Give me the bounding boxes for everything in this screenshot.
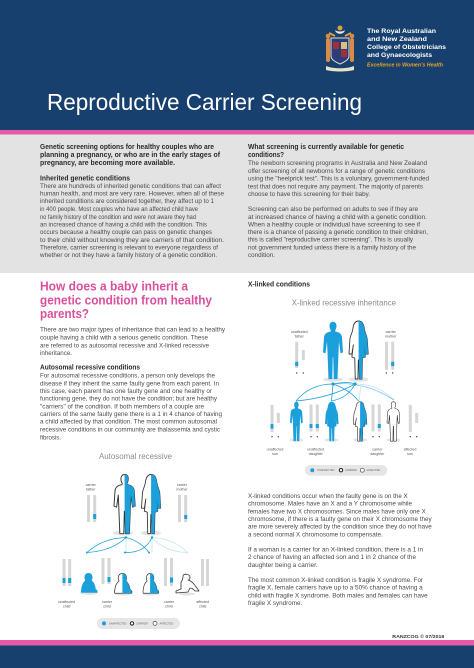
- parent and child labels: carrier: [372, 447, 383, 451]
- figure: carrier child: [114, 574, 132, 593]
- fragile x text: [248, 577, 428, 607]
- header band: [0, 0, 474, 134]
- inherited conditions text: an increased chance of having a child with the condition. This: [40, 221, 208, 228]
- parent and child labels: [58, 483, 209, 608]
- adult screening text: [248, 206, 428, 259]
- parent and child labels: child: [63, 604, 70, 608]
- heading: inherited genetic conditions: Inherited genetic conditions: [40, 175, 130, 182]
- parent and child labels: affected: [404, 447, 416, 451]
- footer band: [0, 640, 474, 668]
- parent and child labels: son: [407, 452, 413, 456]
- parent and child labels: carrier: [86, 483, 97, 487]
- parent and child labels: carrier: [386, 330, 397, 334]
- figure: carrier mother: [142, 474, 161, 534]
- inherited conditions text: human health, and most are very rare. However, when all of these: [40, 190, 224, 197]
- inherited conditions text: [39, 183, 224, 259]
- legend: [305, 465, 387, 476]
- inherited conditions text: inherited conditions are considered together, they affect up to 1: [40, 198, 214, 205]
- autosomal recessive text: "carriers" of the condition. If both members of a couple are: [40, 403, 204, 410]
- carrier chance text: [248, 546, 423, 569]
- college name: The Royal Australian: [367, 29, 436, 35]
- college name: College of Obstetricians: [367, 45, 447, 51]
- inherited conditions text: occurs because a healthy couple can pass on genetic changes: [40, 229, 213, 236]
- fragile x text: fragile X, female carriers have up to a 50% chance of having a: [248, 585, 423, 592]
- parent and child labels: unaffected: [58, 600, 75, 604]
- inheritance arrows: [296, 382, 394, 401]
- figure: unaffected father: [323, 322, 343, 379]
- panel: grey intro: [0, 134, 474, 273]
- x-linked explanation text: chromosome, if there is a faulty gene on their X chromosome they: [248, 516, 432, 523]
- college name: and New Zealand: [367, 37, 427, 43]
- inherited conditions text: whether or not they have a family history of a genetic condition.: [39, 252, 217, 259]
- newborn screening text: The newborn screening programs in Australia and New Zealand: [248, 160, 427, 167]
- parent and child labels: child: [165, 604, 173, 608]
- x-linked explanation text: females have two X chromosomes. Since males have only one X: [248, 508, 426, 515]
- adult screening text: When a healthy couple or individual have screening to see if: [248, 221, 420, 228]
- x-linked explanation text: are more severely affected by the condition since they do not have: [248, 524, 432, 531]
- parent and child labels: child: [199, 604, 206, 608]
- parent and child labels: father: [86, 488, 96, 492]
- fragile x text: child with fragile X syndrome. Both males and females can have: [248, 592, 428, 599]
- figure: carrier daughter: [353, 402, 367, 441]
- college name: Excellence in Women's Health: [367, 63, 443, 69]
- parent and child labels: unaffected: [291, 330, 308, 334]
- chromosome bars: children: [270, 404, 418, 437]
- heading: autosomal recessive conditions: Autosomal recessive conditions: [40, 365, 140, 372]
- figure: carrier mother: [349, 321, 368, 379]
- figure: affected child: [176, 574, 199, 593]
- autosomal recessive text: a child affected by that condition. The most common autosomal: [40, 419, 218, 426]
- legend: UNAFFECTED: [109, 621, 127, 625]
- newborn screening text: offer screening of all newborns for a range of genetic conditions: [248, 168, 426, 175]
- title: Reproductive Carrier Screening: [47, 89, 362, 115]
- inheritance arrows: [86, 536, 188, 554]
- inherited conditions text: Therefore, carrier screening is relevant to everyone regardless of: [40, 244, 218, 251]
- legend: CARRIER: [345, 468, 357, 472]
- inherited conditions text: to their child without knowing they are carriers of that condition.: [40, 237, 224, 244]
- parent and child labels: carrier: [177, 483, 188, 487]
- parent and child labels: daughter: [370, 452, 385, 456]
- parent and child labels: affected: [196, 600, 209, 604]
- shadows: [80, 530, 195, 596]
- intro lead: pregnancy, are becoming more available.: [40, 160, 175, 167]
- parent and child labels: unaffected: [307, 447, 324, 451]
- x-linked explanation text: a second normal X chromosome to compensate.: [248, 531, 383, 538]
- college name: and Gynaecologists: [367, 53, 433, 59]
- parent and child labels: daughter: [309, 452, 324, 456]
- heading: how does a baby inherit: parents?: [40, 306, 89, 321]
- diagram title: X-linked recessive inheritance: [292, 298, 397, 308]
- heading: x-linked conditions: X-linked conditions: [248, 281, 310, 288]
- parent and child labels: carrier: [102, 600, 113, 604]
- heading: what screening is available: conditions?: [248, 152, 284, 159]
- chart: autosomal recessive diagram: [58, 452, 209, 629]
- fragile x text: The most common X-linked condition is fragile X syndrome. For: [248, 577, 424, 584]
- newborn screening text: using the "heelprick test". This is a voluntary, government-funded: [248, 175, 429, 182]
- fragile x text: fragile X syndrome.: [248, 600, 302, 607]
- x-linked explanation text: chromosome. Males have an X and a Y chromosome while: [248, 501, 412, 508]
- carrier chance text: If a woman is a carrier for an X-linked condition, there is a 1 in: [248, 546, 423, 553]
- screening text column: [248, 144, 429, 259]
- parent and child labels: mother: [385, 334, 397, 338]
- parent and child labels: child: [103, 604, 111, 608]
- parent and child labels: [267, 330, 416, 456]
- inheritance intro text: inheritance.: [40, 350, 72, 357]
- newborn screening text: choose to have this screening for their baby.: [248, 191, 370, 198]
- footer credit: RANZCOG © 07/2019: [392, 633, 445, 640]
- legend: [97, 618, 180, 629]
- adult screening text: at increased chance of having a child with a genetic condition.: [248, 214, 427, 221]
- autosomal recessive text: functioning gene, they do not have the condition; but are healthy: [40, 396, 218, 403]
- adult screening text: Screening can also be performed on adults to see if they are: [248, 206, 418, 213]
- autosomal recessive text: For autosomal recessive conditions, a person only develops the: [40, 373, 215, 380]
- heading: what screening is available: What screening is currently available for genetic: [248, 144, 404, 151]
- legend: UNAFFECTED: [317, 468, 335, 472]
- icon: college crest: [326, 26, 354, 72]
- adult screening text: condition.: [248, 252, 275, 259]
- chromosome bars: parents: [87, 495, 187, 522]
- inheritance intro text: couple having a child with a serious genetic condition. These: [40, 335, 208, 342]
- heading: how does a baby inherit: [40, 279, 213, 321]
- inheritance intro text: are referred to as autosomal recessive and X-linked recessive: [40, 342, 209, 349]
- parent and child labels: carrier: [164, 600, 175, 604]
- autosomal recessive text: carriers of the same faulty gene there is a 1 in 4 chance of having: [40, 411, 222, 418]
- chart: x-linked recessive diagram: [267, 298, 418, 476]
- intro lead: planning a pregnancy, or who are in the early stages of: [40, 152, 221, 159]
- inheritance intro text: There are two major types of inheritance that can lead to a healthy: [40, 327, 226, 334]
- autosomal recessive text: [40, 373, 222, 441]
- x-linked explanation text: [248, 493, 432, 538]
- adult screening text: this is called "reproductive carrier screening". This is usually: [248, 236, 414, 243]
- adult screening text: there is a chance of passing a genetic condition to their children,: [248, 229, 428, 236]
- intro text column: [39, 144, 224, 259]
- intro lead: [40, 144, 221, 167]
- autosomal recessive text: disease if they inherit the same faulty gene from each parent. In: [40, 380, 219, 387]
- figure: unaffected daughter: [325, 402, 339, 441]
- heading: how does a baby inherit: How does a baby inherit a: [40, 279, 189, 294]
- figure: affected son: [387, 402, 400, 441]
- inherited conditions text: in 400 people. Most couples who have an affected child have: [40, 206, 198, 213]
- diagram title: Autosomal recessive: [99, 452, 173, 461]
- figure: unaffected child: [81, 573, 98, 593]
- adult screening text: not government funded unless there is a family history of the: [248, 244, 416, 251]
- autosomal recessive text: recessive conditions in our community are thalassemia and cystic: [40, 427, 221, 434]
- autosomal recessive text: fibrosis.: [40, 434, 61, 441]
- parent and child labels: mother: [176, 488, 188, 492]
- x-linked explanation text: X-linked conditions occur when the faulty gene is on the X: [248, 493, 408, 500]
- chromosome bars: children: [62, 558, 209, 586]
- college name: [367, 29, 447, 69]
- legend: CARRIER: [136, 621, 148, 625]
- legend: AFFECTED: [366, 468, 380, 472]
- newborn screening text: [248, 160, 429, 198]
- heading: how does a baby inherit: genetic condition from healthy: [40, 292, 213, 307]
- parent and child labels: unaffected: [267, 447, 283, 451]
- figure: unaffected son: [290, 402, 303, 441]
- autosomal recessive text: this case, each parent has one faulty gene and one healthy or: [40, 388, 213, 395]
- inherited conditions text: There are hundreds of inherited genetic conditions that can affect: [40, 183, 221, 190]
- figure: carrier father: [114, 474, 135, 534]
- inheritance intro text: [40, 327, 226, 357]
- parent and child labels: father: [295, 334, 305, 338]
- intro lead: Genetic screening options for healthy couples who are: [40, 144, 214, 151]
- shadows: [290, 377, 400, 442]
- chromosome bars: parents: [295, 342, 394, 374]
- parent and child labels: son: [272, 452, 278, 456]
- figure: carrier child: [143, 574, 159, 593]
- carrier chance text: daughter being a carrier.: [248, 562, 318, 569]
- carrier chance text: 2 chance of having an affected son and 1 in 2 chance of the: [248, 554, 416, 561]
- inherited conditions text: no family history of the condition and were not aware they had: [40, 214, 196, 221]
- legend: AFFECTED: [160, 621, 173, 625]
- heading: what screening is available: [248, 144, 404, 159]
- newborn screening text: test that does not require any payment. The majority of parents: [248, 183, 424, 190]
